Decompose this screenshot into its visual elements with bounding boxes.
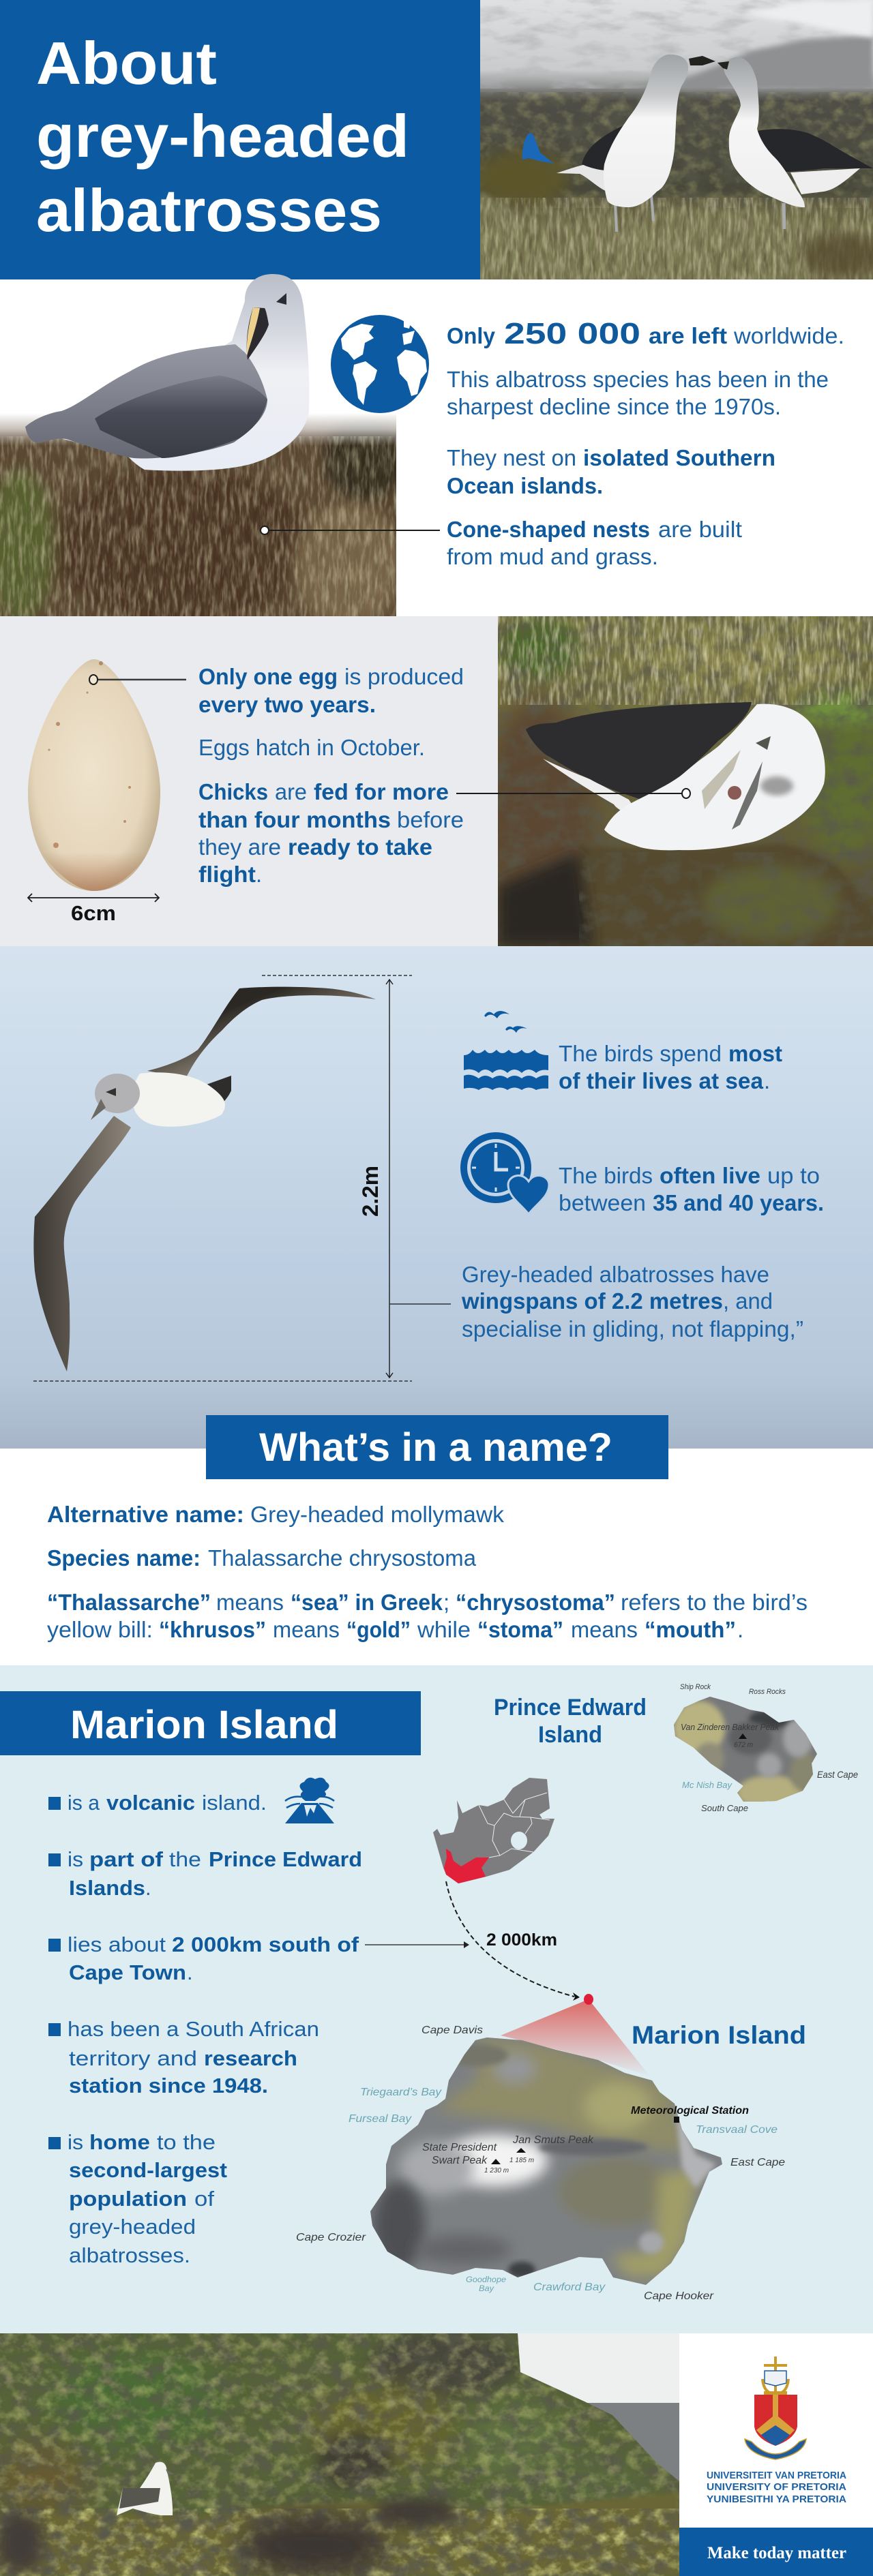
text: population: 250 000	[504, 317, 640, 350]
text: wingspan: wingspans of 2.2 metres	[461, 1288, 723, 1314]
text: chicks: flight	[198, 862, 256, 887]
title	[36, 29, 409, 244]
text: cone-shaped nests: from mud and grass.	[447, 544, 658, 569]
map labels: Cape Davis	[421, 2025, 483, 2036]
text: name meaning: .	[737, 1617, 743, 1642]
text: name meaning: means	[273, 1617, 340, 1642]
title: grey-headed	[36, 102, 409, 170]
icon: clock with heart	[464, 1136, 549, 1214]
panel: what's in a name	[47, 1415, 808, 1642]
list item: volcanic: volcanic	[106, 1791, 195, 1815]
list item: population: to the	[157, 2130, 216, 2154]
panel: egg and chick	[0, 616, 873, 946]
text: lifespan: often live	[660, 1163, 760, 1188]
dimension: egg width	[28, 894, 159, 925]
list item: population: home	[89, 2130, 150, 2154]
text: chicks: they are	[198, 834, 281, 860]
title: albatrosses	[36, 177, 382, 244]
list item: distance from Cape Town: lies about	[68, 1933, 166, 1956]
text: decline: This albatross species has been in the	[447, 367, 829, 392]
panel: University of Pretoria logo	[679, 2333, 873, 2576]
text: name meaning: “stoma”	[477, 1617, 563, 1642]
list item: Prince Edward Islands: part of	[89, 1847, 164, 1871]
icon: university crest	[745, 2357, 806, 2459]
list item: population: is	[68, 2130, 83, 2154]
bird: left albatross	[557, 55, 715, 232]
map labels: Jan Smuts Peak	[512, 2134, 594, 2146]
title: About	[36, 29, 217, 97]
map: Prince Edward Island: 672 m	[734, 1741, 753, 1749]
heading: Prince Edward Island: Prince Edward	[494, 1695, 647, 1721]
text: chicks: fed for more	[314, 779, 449, 804]
panel: title header	[0, 0, 480, 279]
text: university name: UNIVERSITEIT VAN PRETORIA	[707, 2470, 846, 2481]
text: life at sea: of their lives at sea	[559, 1068, 764, 1093]
text: name meaning	[47, 1590, 808, 1642]
list item: Prince Edward Islands: is	[68, 1847, 83, 1871]
text: wingspan: , and	[723, 1288, 773, 1314]
person in blue jacket	[522, 134, 554, 164]
dimension: 2.2m wingspan: 2.2m	[358, 1166, 383, 1217]
heading: Prince Edward Island	[494, 1695, 647, 1748]
map labels: 1 185 m	[509, 2157, 534, 2164]
list item: research station: has been a South African	[68, 2017, 319, 2041]
map labels: Goodhope	[466, 2275, 506, 2284]
map labels: Triegaard’s Bay	[360, 2087, 442, 2098]
list item: distance from Cape Town: Cape Town	[69, 1960, 186, 1984]
panel: wingspan and life at sea	[0, 946, 873, 1449]
text: hatching: Eggs hatch in October.	[198, 735, 425, 760]
list item: population: population	[69, 2187, 187, 2211]
text: name meaning: “sea” in Greek	[291, 1590, 443, 1615]
text: chicks: .	[256, 862, 262, 887]
text: species name	[47, 1545, 477, 1571]
text: species name: Thalassarche chrysostoma	[208, 1545, 477, 1571]
text: name meaning: refers to the bird’s	[621, 1590, 808, 1615]
text: alternative name: Alternative name:	[47, 1502, 244, 1527]
text: name meaning: means	[216, 1590, 284, 1615]
map labels: East Cape	[730, 2157, 785, 2168]
arrow: distance leader	[365, 1941, 469, 1948]
text: cone-shaped nests	[447, 517, 742, 569]
photo: two albatrosses courting	[474, 0, 873, 279]
panel: population and nesting facts	[0, 274, 844, 627]
icon: volcano	[285, 1778, 334, 1823]
map labels: Cape Crozier	[296, 2232, 366, 2243]
text: university name: UNIVERSITY OF PRETORIA	[707, 2481, 846, 2493]
bird: albatross on rock	[117, 2462, 175, 2515]
text: lifespan: up to	[767, 1163, 820, 1188]
list item: volcanic: is a	[68, 1791, 100, 1815]
map labels	[296, 2025, 785, 2302]
heading: Prince Edward Island: Island	[538, 1722, 602, 1748]
label: 2 000km: 2 000km	[486, 1930, 557, 1950]
text: lifespan: 35 and 40 years.	[653, 1190, 824, 1215]
list item: distance from Cape Town: .	[187, 1960, 193, 1984]
text: university name: YUNIBESITHI YA PRETORIA	[707, 2494, 846, 2505]
map labels: Cape Hooker	[644, 2290, 714, 2302]
text: one egg	[198, 664, 464, 717]
list item: population: second-largest	[69, 2158, 227, 2182]
text: population: Only	[447, 323, 496, 348]
list item: research station: territory and	[69, 2046, 197, 2070]
text: chicks	[198, 779, 464, 887]
list item: Prince Edward Islands	[48, 1847, 362, 1900]
text: one egg: every two years.	[198, 692, 376, 717]
callout: nest leader line	[261, 526, 440, 534]
text: islands	[447, 445, 775, 498]
list item: population	[48, 2130, 227, 2267]
text: name meaning: yellow bill:	[47, 1617, 153, 1642]
text: population: worldwide.	[733, 323, 844, 348]
list item: population: albatrosses.	[69, 2243, 190, 2267]
text: chicks: Chicks	[198, 779, 268, 804]
text: name meaning: means	[571, 1617, 638, 1642]
text: lifespan: The birds	[559, 1163, 653, 1188]
map labels: State President	[422, 2142, 497, 2153]
panel: Marion Island	[0, 1665, 873, 2333]
text: islands: isolated Southern	[583, 445, 775, 470]
photo: Marion Island cliffs with albatross	[0, 2331, 679, 2576]
map labels: Meteorological Station	[631, 2105, 749, 2117]
text: alternative name	[47, 1502, 505, 1527]
photo: egg	[28, 659, 160, 891]
text: wingspan: specialise in gliding, not flapping,”	[462, 1316, 803, 1342]
text: chicks: before	[397, 807, 464, 832]
text: chicks: than four months	[198, 807, 391, 832]
label: Marion Island: Marion Island	[632, 2021, 806, 2049]
text: islands: Ocean islands.	[447, 473, 603, 498]
callout: chick leader line	[456, 789, 690, 798]
list item: distance from Cape Town	[48, 1933, 359, 1984]
text: wingspan: Grey-headed albatrosses have	[462, 1262, 769, 1287]
text: chicks: are	[275, 779, 307, 804]
text: name meaning: “khrusos”	[159, 1617, 266, 1642]
list item: research station: research	[204, 2046, 297, 2070]
slogan: make today matter: Make today matter	[707, 2544, 846, 2562]
map pointer cone	[501, 1994, 650, 2076]
icon: globe	[331, 315, 429, 413]
map: Prince Edward Island: East Cape	[817, 1769, 858, 1780]
heading: Marion Island: Marion Island	[70, 1703, 338, 1747]
map: Prince Edward Island: Ross Rocks	[749, 1688, 786, 1696]
list item: Prince Edward Islands: the	[169, 1847, 201, 1871]
text: name meaning: while	[417, 1617, 471, 1642]
text: name meaning: “gold”	[346, 1617, 411, 1642]
text: name meaning: “Thalassarche”	[47, 1590, 211, 1615]
map: Prince Edward Island: South Cape	[701, 1803, 748, 1813]
list item: Prince Edward Islands: Prince Edward	[209, 1847, 362, 1871]
list item: volcanic	[48, 1791, 267, 1815]
list item: population: of	[194, 2187, 214, 2211]
text: wingspan	[461, 1262, 803, 1342]
text: islands: They nest on	[447, 445, 576, 470]
list item: Prince Edward Islands: Islands	[69, 1876, 145, 1900]
slogan: make today matter	[679, 2528, 873, 2576]
photo: albatross on cone nest	[0, 274, 406, 627]
map labels: Bay	[479, 2284, 494, 2293]
text: cone-shaped nests: Cone-shaped nests	[447, 517, 650, 542]
heading: what's in a name: What’s in a name?	[259, 1425, 612, 1470]
photo: albatross in flight	[33, 987, 376, 1372]
list item: research station: station since 1948.	[69, 2074, 268, 2097]
map labels: Transvaal Cove	[696, 2124, 778, 2136]
text: life at sea: The birds spend	[559, 1041, 722, 1066]
text: name meaning: “chrysostoma”	[456, 1590, 615, 1615]
list item: population: grey-headed	[69, 2215, 196, 2239]
text: chicks: ready to take	[288, 834, 432, 860]
text: life at sea: most	[728, 1041, 782, 1066]
text: population: are left	[649, 323, 727, 348]
photo: adult feeding chick	[481, 616, 873, 946]
text: one egg: is produced	[344, 664, 464, 689]
text: decline: sharpest decline since the 1970s.	[447, 394, 781, 419]
text: alternative name: Grey-headed mollymawk	[250, 1502, 505, 1527]
list item: volcanic: island.	[202, 1791, 267, 1815]
text: university name	[707, 2470, 846, 2505]
map labels: Swart Peak	[432, 2155, 488, 2166]
heading: what's in a name	[206, 1415, 668, 1479]
list item: research station	[48, 2017, 319, 2097]
text: species name: Species name:	[47, 1545, 201, 1571]
map labels: Furseal Bay	[349, 2113, 412, 2125]
dimension: 2.2m wingspan	[33, 975, 451, 1381]
map: Prince Edward Island: Mc Nish Bay	[682, 1780, 733, 1790]
callout: egg leader line	[89, 675, 186, 684]
bird: right albatross	[717, 57, 873, 229]
list item: Prince Edward Islands: .	[145, 1876, 151, 1900]
map labels: Crawford Bay	[533, 2282, 606, 2293]
map: Marion Island	[296, 1994, 785, 2302]
dimension: egg width: 6cm	[71, 901, 116, 925]
text: lifespan: between	[559, 1190, 646, 1215]
map: Prince Edward Island	[672, 1683, 858, 1813]
bird on nest	[25, 274, 309, 471]
map: South Africa	[433, 1778, 554, 1883]
map: Prince Edward Island: Ship Rock	[680, 1683, 711, 1691]
heading: Marion Island	[0, 1691, 421, 1755]
text: cone-shaped nests: are built	[658, 517, 742, 542]
text: decline	[447, 367, 829, 419]
text: name meaning: ;	[443, 1590, 449, 1615]
icon: sea waves and gulls	[464, 1011, 548, 1090]
text: name meaning: “mouth”	[645, 1617, 736, 1642]
text: life at sea: .	[764, 1068, 770, 1093]
text: one egg: Only one egg	[198, 664, 338, 689]
arrow: dashed route to Marion Island	[446, 1881, 580, 2001]
map: Prince Edward Island: Van Zinderen Bakker Peak	[681, 1722, 780, 1732]
text: life at sea	[559, 1041, 782, 1093]
text: population	[447, 317, 844, 350]
text: lifespan	[559, 1163, 824, 1215]
bird: adult with chick	[526, 702, 825, 850]
list item: distance from Cape Town: 2 000km south of	[172, 1933, 359, 1956]
map labels: 1 230 m	[484, 2167, 509, 2175]
